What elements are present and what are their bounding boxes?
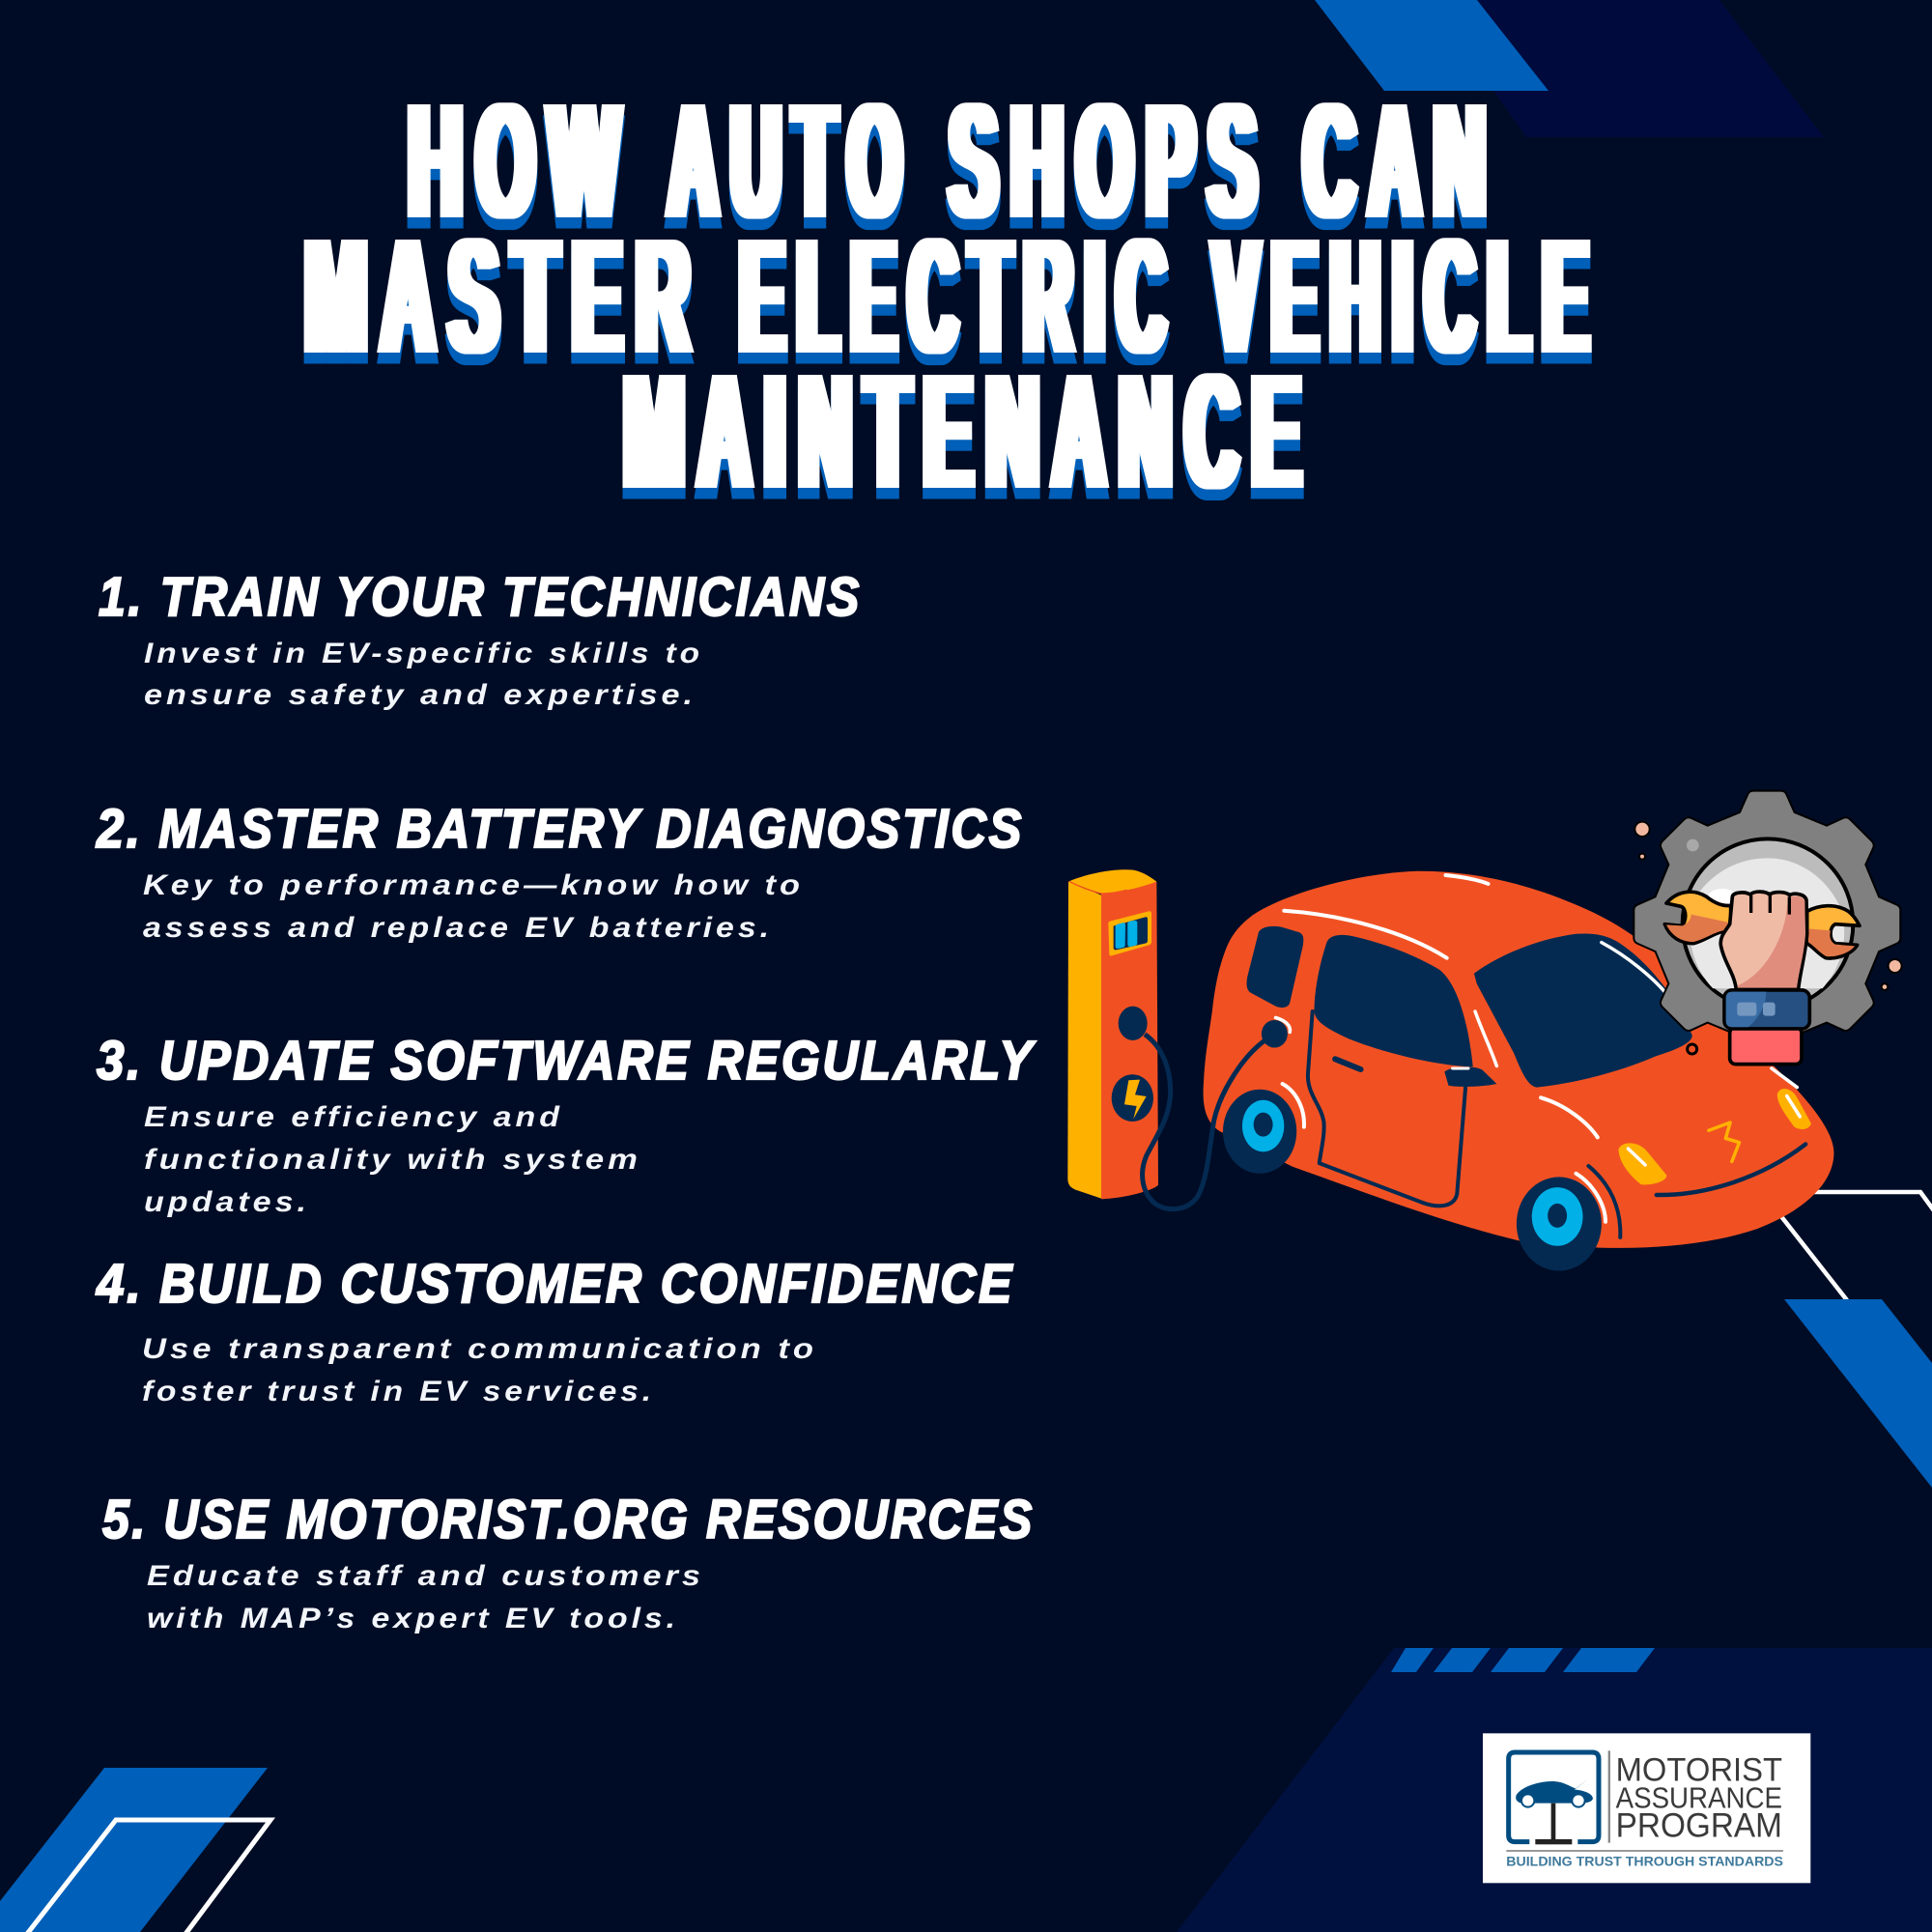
- step 2: [96, 798, 1024, 944]
- title: CAN: [1304, 70, 1499, 253]
- bottom left blue shape: [0, 1768, 268, 1932]
- charging cable: [1143, 1035, 1265, 1209]
- bottom right stripes: [1391, 1648, 1655, 1672]
- right blue shape: [1784, 1299, 1932, 1488]
- step 4: foster trust in EV services.: [142, 1376, 655, 1407]
- logo wordmark: ASSURANCE: [1616, 1782, 1782, 1815]
- step 3: 3. UPDATE SOFTWARE REGULARLY: [97, 1030, 1037, 1092]
- mirror: [1444, 1066, 1496, 1087]
- front wheel: [1517, 1177, 1602, 1271]
- watch cuff: [1724, 990, 1809, 1065]
- logo panel: [1483, 1733, 1810, 1883]
- right white outline: [1780, 1192, 1932, 1300]
- sparkle dots: [1634, 822, 1902, 1054]
- logo wordmark: MOTORIST: [1616, 1751, 1782, 1788]
- icon: gear with hand and wrench: [1634, 797, 1902, 1065]
- step 5: Educate staff and customers: [147, 1560, 704, 1592]
- icon: charging station: [1067, 869, 1158, 1199]
- step 3: [97, 1030, 1037, 1218]
- wrench: [1664, 892, 1860, 958]
- logo tagline: BUILDING TRUST THROUGH STANDARDS: [1506, 1853, 1783, 1868]
- logo icon: [1509, 1752, 1599, 1844]
- top right navy shape: [1477, 0, 1824, 137]
- step 3: updates.: [144, 1186, 310, 1218]
- step 2: 2. MASTER BATTERY DIAGNOSTICS: [96, 798, 1024, 860]
- step 4: Use transparent communication to: [142, 1333, 817, 1365]
- title: AUTO: [668, 70, 915, 253]
- step 1: [99, 566, 862, 711]
- step 2: Key to performance—know how to: [143, 869, 804, 901]
- door, trim and grille lines: [1308, 1011, 1805, 1237]
- step 4: [96, 1253, 1014, 1407]
- headlights: [1619, 1089, 1811, 1184]
- hand: [1720, 892, 1807, 989]
- step 1: 1. TRAIN YOUR TECHNICIANS: [99, 566, 862, 628]
- title: [305, 70, 1602, 524]
- step 4: 4. BUILD CUSTOMER CONFIDENCE: [96, 1253, 1014, 1315]
- title: MASTER: [305, 205, 704, 388]
- white highlights: [1276, 875, 1797, 1222]
- title: SHOPS: [950, 70, 1270, 253]
- step 5: [102, 1489, 1035, 1634]
- logo wordmark: PROGRAM: [1616, 1807, 1782, 1845]
- title: ELECTRIC: [740, 205, 1179, 388]
- step 5: with MAP’s expert EV tools.: [147, 1603, 679, 1634]
- top right blue shape: [1315, 0, 1548, 91]
- step 5: 5. USE MOTORIST.ORG RESOURCES: [102, 1489, 1035, 1550]
- step 3: functionality with system: [144, 1144, 641, 1176]
- hood bolt: [1709, 1122, 1739, 1161]
- title: HOW: [409, 70, 634, 253]
- step 2: assess and replace EV batteries.: [143, 912, 773, 944]
- step 1: Invest in EV-specific skills to: [144, 638, 703, 669]
- logo wordmark: [1616, 1751, 1782, 1845]
- bottom left white outline: [27, 1820, 270, 1932]
- step 1: ensure safety and expertise.: [144, 679, 696, 711]
- charge port: [1262, 1020, 1288, 1048]
- car body: [1204, 871, 1833, 1248]
- gear: [1640, 797, 1894, 1051]
- windows: [1247, 926, 1692, 1088]
- rear wheel: [1223, 1090, 1296, 1174]
- step 3: Ensure efficiency and: [144, 1101, 563, 1133]
- illustration: electric car: [1204, 871, 1833, 1271]
- bottom right navy panel: [1177, 1648, 1932, 1932]
